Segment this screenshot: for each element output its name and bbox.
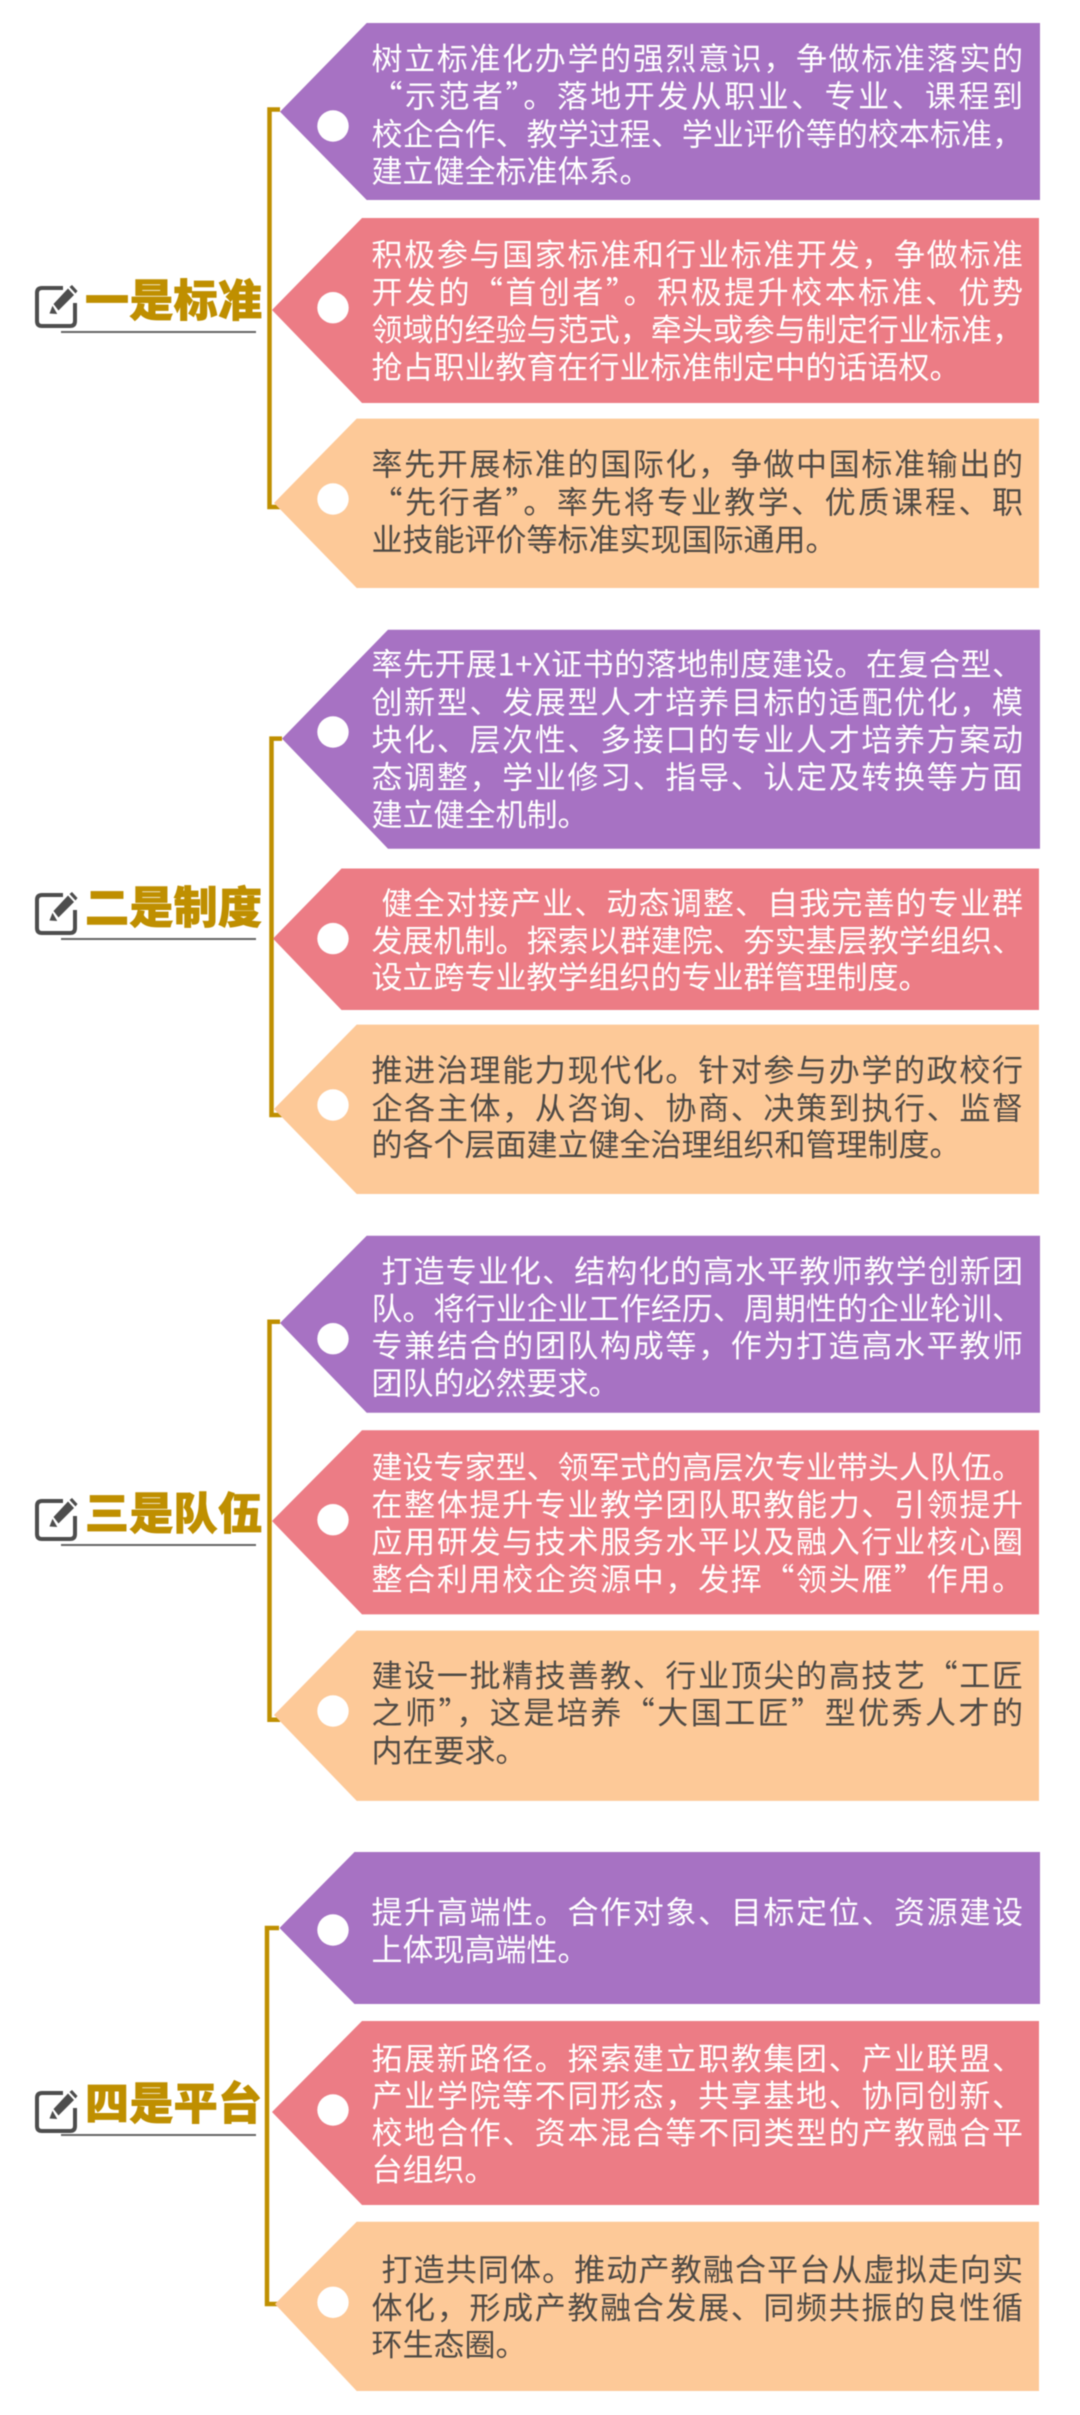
text block: 建立健全标准体系。 [372, 147, 650, 192]
text block: 环生态圈。 [372, 2320, 526, 2365]
text block: 打造专业化、结构化的高水平教师教学创新团 [382, 1247, 1023, 1292]
text block: 校企合作、教学过程、学业评价等的校本标准， [372, 110, 1023, 154]
text block: 率先开展1+X证书的落地制度建设。在复合型、 [372, 640, 1023, 685]
icon: pencil and note [37, 892, 78, 933]
text block [372, 2245, 1023, 2365]
bullet [317, 483, 349, 515]
bullet [317, 1695, 349, 1727]
text block: 应用研发与技术服务水平以及融入行业核心圈 [372, 1517, 1023, 1562]
text block: 健全对接产业、动态调整、自我完善的专业群 [382, 878, 1023, 923]
text block: 专兼结合的团队构成等，作为打造高水平教师 [372, 1321, 1023, 1366]
text block [372, 640, 1023, 835]
text block: 建设一批精技善教、行业顶尖的高技艺“工匠 [372, 1651, 1023, 1696]
text block: 业技能评价等标准实现国际通用。 [372, 515, 836, 560]
text block: 的各个层面建立健全治理组织和管理制度。 [372, 1120, 960, 1165]
heading: 二是制度 [37, 872, 262, 940]
text block: 创新型、发展型人才培养目标的适配优化，模 [372, 677, 1023, 722]
text block: 体化，形成产教融合发展、同频共振的良性循 [372, 2283, 1023, 2328]
heading: 四是平台 [37, 2068, 262, 2136]
text block: 队。将行业企业工作经历、周期性的企业轮训、 [372, 1284, 1023, 1329]
text block [372, 1651, 1023, 1771]
text block: 发展机制。探索以群建院、夯实基层教学组织、 [372, 916, 1023, 961]
panel: purple item 1 [280, 23, 1040, 200]
bullet [317, 2094, 349, 2126]
heading underline [61, 2134, 256, 2136]
panel: orange item 3 [274, 419, 1039, 588]
panel: pink item 2 [273, 868, 1039, 1010]
text block: 上体现高端性。 [372, 1925, 588, 1970]
text block: 台组织。 [372, 2145, 496, 2190]
heading underline [61, 938, 256, 940]
text block: 团队的必然要求。 [372, 1359, 620, 1404]
section 1: 一是标准 [37, 23, 1040, 588]
bracket connector [270, 1322, 280, 1720]
text block: 提升高端性。合作对象、目标定位、资源建设 [372, 1887, 1023, 1932]
panel: purple item 1 [280, 1236, 1040, 1413]
bracket connector [272, 739, 282, 1115]
text block [372, 2034, 1023, 2190]
heading text: 一是标准 [85, 265, 262, 329]
text block: “示范者”。落地开发从职业、专业、课程到 [372, 72, 1023, 116]
text block [372, 1247, 1023, 1404]
panel: orange item 3 [274, 1025, 1039, 1194]
icon: pencil and note [37, 1498, 78, 1539]
text block: 块化、层次性、多接口的专业人才培养方案动 [372, 715, 1023, 760]
panel: pink item 2 [272, 2021, 1039, 2205]
text block: 产业学院等不同形态，共享基地、协同创新、 [372, 2071, 1023, 2116]
bullet [317, 292, 349, 323]
text block: 设立跨专业教学组织的专业群管理制度。 [372, 953, 930, 998]
panel: pink item 2 [272, 218, 1039, 403]
text block: 推进治理能力现代化。针对参与办学的政校行 [372, 1046, 1023, 1091]
text block [372, 1046, 1023, 1165]
text block: 在整体提升专业教学团队职教能力、引领提升 [372, 1480, 1023, 1525]
bullet [317, 1914, 349, 1946]
text block [372, 230, 1023, 388]
text block: 校地合作、资本混合等不同类型的产教融合平 [372, 2108, 1023, 2153]
bullet [317, 1089, 349, 1121]
text block [372, 878, 1023, 998]
text block: 开发的“首创者”。积极提升校本标准、优势 [372, 267, 1023, 312]
text block: 企各主体，从咨询、协商、决策到执行、监督 [372, 1083, 1023, 1128]
text block: 积极参与国家标准和行业标准开发，争做标准 [372, 230, 1023, 275]
heading text: 四是平台 [85, 2068, 262, 2132]
heading: 三是队伍 [37, 1478, 262, 1546]
bullet [317, 716, 349, 748]
bullet [317, 110, 349, 142]
bullet [317, 923, 349, 954]
text block [372, 34, 1023, 192]
text block [372, 440, 1023, 560]
text block: “先行者”。率先将专业教学、优质课程、职 [372, 477, 1023, 522]
section 2: 二是制度 [37, 630, 1040, 1194]
panel: purple item 1 [280, 1852, 1040, 2004]
heading: 一是标准 [37, 265, 262, 333]
panel: orange item 3 [274, 1631, 1039, 1801]
text block: 内在要求。 [372, 1726, 526, 1771]
text block: 整合利用校企资源中，发挥“领头雁”作用。 [372, 1555, 1023, 1600]
text block: 树立标准化办学的强烈意识，争做标准落实的 [372, 34, 1023, 79]
icon: pencil and note [37, 285, 78, 326]
bracket connector [267, 1928, 279, 2304]
text block: 领域的经验与范式，牵头或参与制定行业标准， [372, 305, 1023, 350]
icon: pencil and note [37, 2090, 78, 2131]
text block: 打造共同体。推动产教融合平台从虚拟走向实 [382, 2245, 1023, 2290]
text block [372, 1887, 1023, 1970]
text block: 率先开展标准的国际化，争做中国标准输出的 [372, 440, 1023, 485]
text block: 之师”，这是培养“大国工匠”型优秀人才的 [372, 1688, 1023, 1733]
text block: 态调整，学业修习、指导、认定及转换等方面 [372, 753, 1023, 798]
panel: pink item 2 [272, 1430, 1039, 1614]
heading text: 二是制度 [85, 872, 262, 936]
text block [372, 1443, 1023, 1600]
section 3: 三是队伍 [37, 1236, 1040, 1801]
bracket connector [270, 110, 280, 507]
bullet [317, 1504, 349, 1535]
text block: 建设专家型、领军式的高层次专业带头人队伍。 [372, 1443, 1023, 1488]
panel: purple item 1 [282, 630, 1040, 849]
section 4: 四是平台 [37, 1852, 1040, 2391]
bullet [317, 1323, 349, 1354]
heading underline [61, 1544, 256, 1546]
text block: 拓展新路径。探索建立职教集团、产业联盟、 [372, 2034, 1023, 2079]
text block: 建立健全机制。 [372, 790, 588, 835]
panel: orange item 3 [275, 2222, 1039, 2391]
heading text: 三是队伍 [85, 1478, 262, 1542]
heading underline [61, 331, 256, 333]
text block: 抢占职业教育在行业标准制定中的话语权。 [372, 343, 960, 388]
bullet [317, 2287, 349, 2318]
